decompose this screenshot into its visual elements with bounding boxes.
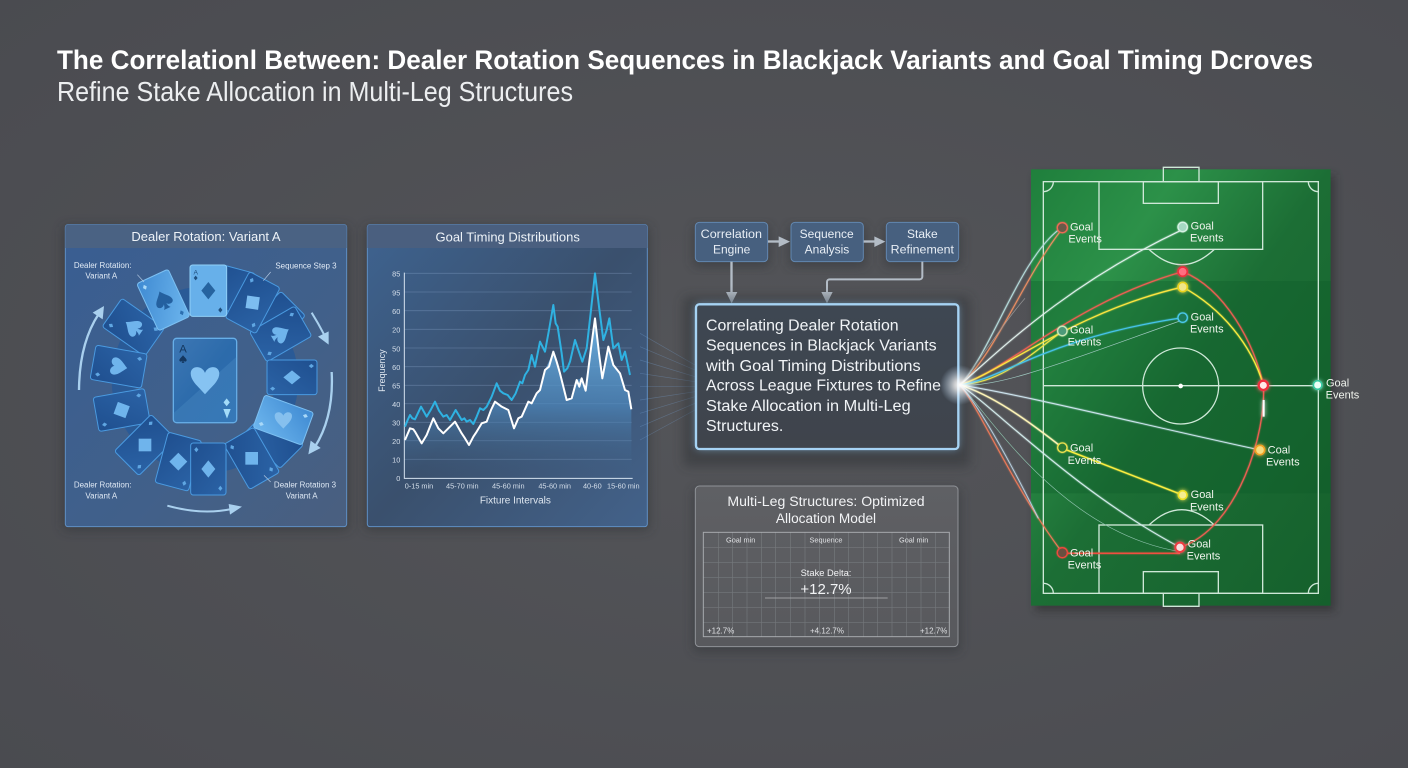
node: goal events yellow lower [1178, 489, 1224, 513]
node: yellow upper [1178, 282, 1187, 292]
arrow: sequence to stake [864, 236, 885, 247]
main description text [705, 317, 941, 435]
label: dealer rotation bottom left [74, 480, 132, 500]
box: stake refinement [884, 222, 961, 267]
node: goal events top centre: Events [1190, 233, 1224, 245]
grid column headers: Goal min [899, 535, 928, 544]
node: goal events red lower: Goal [1188, 538, 1211, 550]
node: goal events cyan [1178, 312, 1224, 336]
goal event nodes and labels [1057, 221, 1360, 572]
grid footer values [707, 627, 947, 636]
x axis labels: 45-70 min [446, 481, 479, 490]
center card: ace [173, 338, 237, 423]
node: goal events teal left: Goal [1070, 324, 1093, 336]
y axis labels [392, 270, 400, 483]
y axis labels: 20 [392, 326, 400, 335]
node: goal events top left: Events [1068, 233, 1102, 245]
y axis labels: 85 [392, 270, 400, 279]
node: goal events teal left: Events [1068, 337, 1102, 349]
card wheel [90, 265, 317, 495]
flow diagram and main box [640, 222, 970, 467]
y axis labels: 20 [392, 437, 400, 446]
node: goal events red left: Events [1068, 560, 1102, 572]
panel heading: multi-leg: Multi-Leg Structures: Optimized [727, 494, 925, 509]
area under white series [405, 318, 631, 478]
node: red halfway [1259, 381, 1268, 390]
node: goal events top centre: Goal [1191, 221, 1214, 233]
label: dealer rotation bottom right: Variant A [286, 491, 318, 500]
y axis labels: 30 [392, 419, 400, 428]
stake delta callout: Stake Delta: [801, 568, 851, 578]
center card: ace: A [179, 344, 187, 356]
main description box [683, 297, 970, 467]
panel: football pitch [1031, 167, 1335, 611]
line chart [377, 270, 640, 506]
main description text: Sequences in Blackjack Variants [706, 338, 937, 355]
connection lines: hub to goal events [960, 230, 1264, 553]
arrow: refinement to main box [821, 262, 922, 303]
y axis labels: 50 [392, 344, 400, 353]
hub glow [940, 365, 980, 405]
panel heading: goal timing [367, 225, 647, 248]
y axis title: Frequency [377, 349, 387, 392]
node: goal events red left: Goal [1070, 548, 1093, 560]
panel heading: dealer rotation [65, 225, 347, 248]
label: dealer rotation bottom left: Variant A [85, 491, 118, 500]
x axis labels: 45-60 min [492, 481, 525, 490]
y axis labels: 95 [392, 288, 400, 297]
node: goal events orange: Events [1266, 457, 1300, 469]
faint rays into main box [640, 333, 695, 440]
card wheel: A [193, 270, 198, 277]
node: goal events top left [1057, 221, 1102, 245]
label: dealer rotation bottom right: Dealer Rotation 3 [274, 480, 337, 489]
y axis labels: 40 [392, 400, 400, 409]
node: goal events cyan: Events [1190, 324, 1224, 336]
stake delta callout [765, 568, 888, 598]
subtitle: Refine Stake Allocation in Multi-Leg Structures [57, 76, 573, 107]
grid column headers [726, 535, 928, 544]
grid column headers: Goal min [726, 535, 755, 544]
card ring base [123, 298, 287, 462]
label: dealer rotation top left [74, 261, 144, 282]
node: goal events orange: Coal [1268, 445, 1290, 457]
stake delta callout: +12.7% [800, 581, 852, 598]
node: goal events yellow left [1058, 443, 1102, 467]
box: correlation engine: Engine [713, 242, 751, 256]
blue series [405, 273, 630, 427]
allocation grid [703, 532, 949, 637]
x axis labels [405, 481, 640, 490]
node: red upper [1178, 267, 1187, 276]
label: sequence step: Sequence Step 3 [275, 262, 337, 271]
box: correlation engine: Correlation [701, 227, 762, 241]
node: goal events cyan: Goal [1191, 312, 1214, 324]
y axis labels: 60 [392, 307, 400, 316]
panel heading: dealer rotation: Dealer Rotation: Variant A [131, 229, 281, 244]
label: dealer rotation bottom left: Dealer Rotation: [74, 480, 132, 489]
grid footer values: +4.12.7% [810, 627, 844, 636]
box: correlation engine [693, 222, 770, 267]
node: goal events top centre [1178, 221, 1224, 245]
panel heading second line: Allocation Model [776, 511, 876, 526]
main description text: Across League Fixtures to Refine [706, 378, 941, 395]
x axis labels: 15-60 min [607, 481, 640, 490]
x axis title: Fixture Intervals [480, 495, 551, 506]
node: goal events red lower: Events [1187, 551, 1221, 563]
box: stake refinement: Refinement [891, 242, 955, 256]
panel: dealer rotation [63, 225, 349, 530]
arrow: engine to main box [726, 262, 737, 303]
box: sequence analysis [789, 222, 866, 267]
x axis labels: 40-60 [583, 481, 602, 490]
y axis labels: 0 [396, 474, 400, 483]
panel: multi-leg structures [693, 486, 960, 652]
node: goal events touchline: Events [1326, 389, 1360, 401]
label: dealer rotation bottom right [264, 475, 337, 500]
y axis labels: 60 [392, 363, 400, 372]
box: stake refinement: Stake [907, 227, 938, 241]
arrow: rotation right [308, 372, 332, 454]
box: sequence analysis: Analysis [805, 242, 849, 256]
node: goal events touchline: Goal [1326, 377, 1349, 389]
arrow: engine to sequence [768, 236, 790, 247]
label: dealer rotation top left: Dealer Rotation: [74, 261, 132, 270]
node: goal events red left [1057, 548, 1102, 572]
axes [404, 273, 633, 478]
label: sequence step [263, 262, 337, 281]
panel: goal timing distributions [365, 225, 649, 530]
node: goal events yellow lower: Events [1190, 501, 1224, 513]
node: goal events yellow left: Events [1068, 455, 1102, 467]
main description text: Stake Allocation in Multi-Leg [706, 398, 911, 415]
arrow: rotation left [79, 306, 104, 390]
node: goal events teal left [1058, 324, 1102, 349]
node: goal events touchline [1313, 377, 1360, 401]
y axis labels: 10 [392, 456, 400, 465]
grid footer values: +12.7% [707, 627, 734, 636]
x axis labels: 45-60 min [538, 481, 571, 490]
node: goal events top left: Goal [1070, 221, 1093, 233]
grid footer values: +12.7% [920, 627, 947, 636]
white series [405, 318, 631, 445]
arrow: rotation bottom [167, 504, 242, 515]
y axis labels: 65 [392, 382, 400, 391]
x axis labels: 0-15 min [405, 481, 433, 490]
label: dealer rotation top left: Variant A [85, 272, 118, 281]
main description text: Structures. [706, 418, 783, 435]
box: sequence analysis: Sequence [800, 227, 854, 241]
node: goal events yellow lower: Goal [1191, 489, 1214, 501]
main description text: Correlating Dealer Rotation [706, 317, 899, 334]
main description text: with Goal Timing Distributions [705, 358, 921, 375]
title: The Correlationl Between: Dealer Rotation Sequences in Blackjack Variants and Goal Timing Dcroves [57, 45, 1313, 75]
arrow: rotation top right [312, 313, 329, 345]
pitch markings [1043, 167, 1318, 606]
node: goal events red lower [1175, 538, 1221, 563]
grid column headers: Sequence [809, 535, 843, 544]
panel heading: goal timing: Goal Timing Distributions [436, 229, 580, 244]
node: goal events yellow left: Goal [1070, 443, 1093, 455]
node: goal events orange [1255, 445, 1300, 469]
